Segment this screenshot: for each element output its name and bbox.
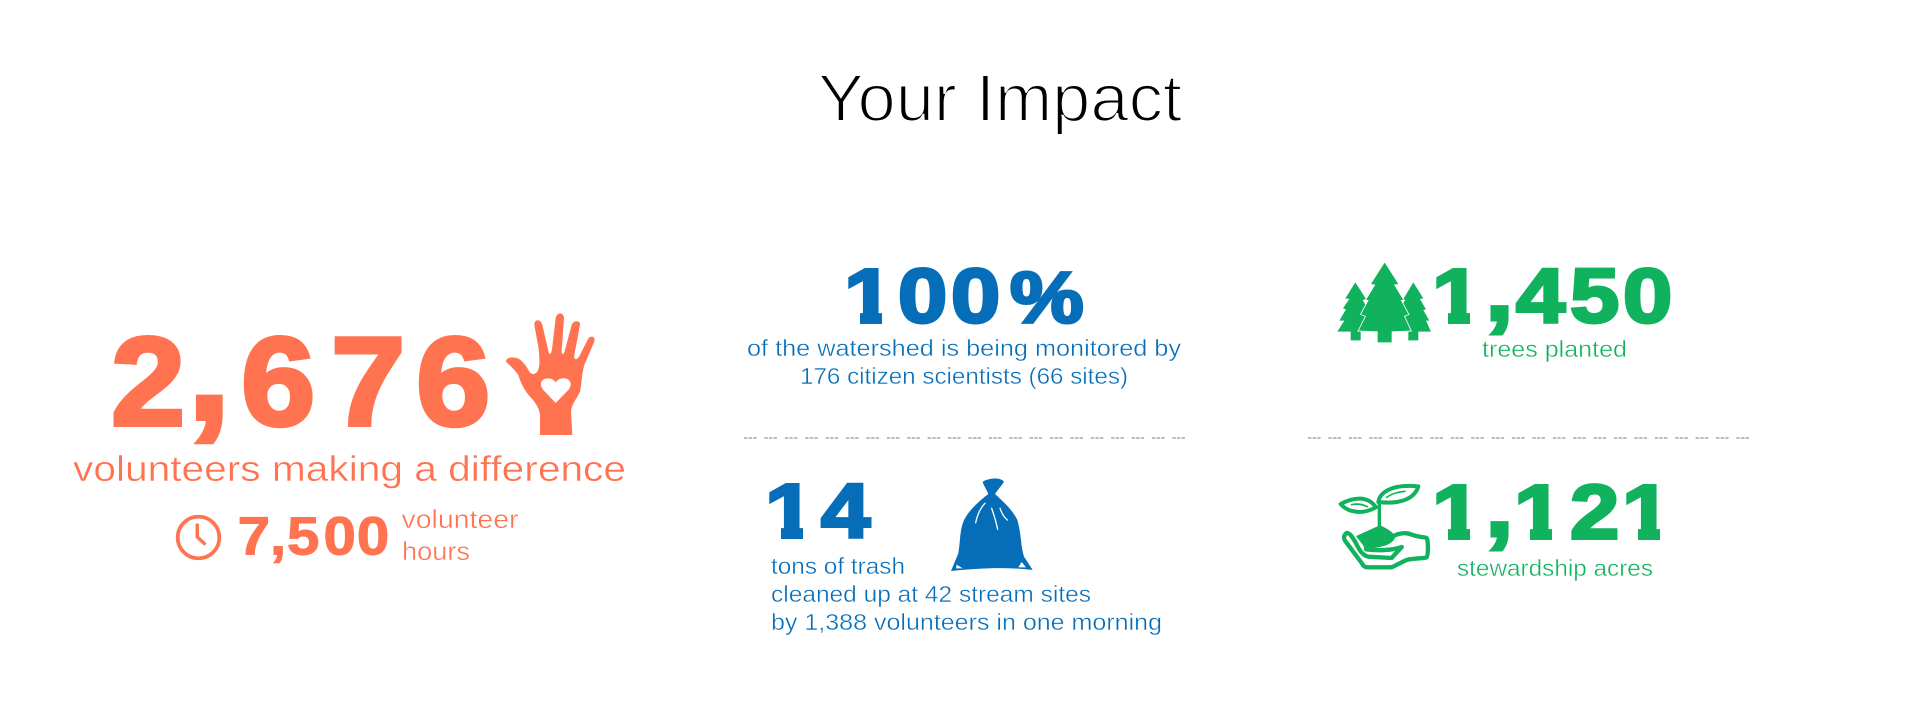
divider: right column xyxy=(1308,437,1749,439)
big number: trees: 5 xyxy=(1570,253,1619,339)
caption: volunteer hours: volunteer xyxy=(402,504,519,534)
big number: 100%: 0 xyxy=(898,253,947,339)
big number: volunteers: 6 xyxy=(241,310,315,452)
big number: volunteers: 6 xyxy=(416,310,490,452)
big number: acres: , xyxy=(1485,454,1514,555)
caption: watershed monitored xyxy=(747,335,1181,389)
number: volunteer hours: 7 xyxy=(238,505,270,566)
big number: 100% xyxy=(842,253,1084,339)
big number: acres: 1 xyxy=(1432,469,1481,555)
caption: volunteer hours xyxy=(402,504,519,566)
big number: acres xyxy=(1430,454,1677,555)
big number: 100%: % xyxy=(1010,258,1084,338)
caption: trash cleanup: cleaned up at 42 stream sites xyxy=(771,581,1091,607)
icon: seedling in hand xyxy=(1341,486,1428,567)
number: volunteer hours: 0 xyxy=(357,505,389,566)
caption: stewardship acres: stewardship acres xyxy=(1457,555,1653,581)
caption: watershed monitored: of the watershed is being monitored by xyxy=(747,335,1181,361)
big number: acres: 1 xyxy=(1622,469,1671,555)
panel: watershed monitoring xyxy=(747,253,1181,389)
big number: trees: 4 xyxy=(1516,253,1565,339)
caption: trash cleanup: tons of trash xyxy=(771,553,905,579)
big number: acres: 1 xyxy=(1514,469,1563,555)
panel: trash cleanup xyxy=(763,468,1162,635)
caption: watershed monitored: 176 citizen scientists (66 sites) xyxy=(800,363,1128,389)
big number: trees xyxy=(1430,238,1672,339)
number: volunteer hours: , xyxy=(270,505,286,566)
divider: middle column xyxy=(744,437,1185,439)
big number: 14 xyxy=(763,468,870,554)
big number: trees: , xyxy=(1485,238,1514,339)
panel: trees planted xyxy=(1337,238,1672,362)
panel: volunteers xyxy=(73,283,626,566)
big number: volunteers: 2 xyxy=(111,310,185,452)
icon: hand with heart xyxy=(506,313,595,435)
caption: volunteers making a difference: volunteers making a difference xyxy=(73,448,626,489)
caption: trash cleanup: by 1,388 volunteers in one morning xyxy=(771,609,1162,635)
caption: trash cleanup xyxy=(771,553,1162,635)
big number: volunteers: 7 xyxy=(331,310,405,452)
big number: 14: 1 xyxy=(765,468,814,554)
number: volunteer hours: 0 xyxy=(323,505,356,566)
icon: clock xyxy=(178,517,219,558)
big number: 14: 4 xyxy=(821,468,870,554)
caption: trees planted: trees planted xyxy=(1482,336,1627,362)
big number: volunteers: , xyxy=(187,283,231,451)
icon: trash bag xyxy=(951,479,1033,571)
big number: 100%: 0 xyxy=(951,253,1000,339)
number: volunteer hours: 5 xyxy=(287,505,319,566)
big number: trees: 0 xyxy=(1623,253,1672,339)
big number: trees: 1 xyxy=(1432,253,1481,339)
title: Your Impact xyxy=(818,61,1182,136)
big number: 100%: 1 xyxy=(844,253,893,339)
big number: acres: 2 xyxy=(1570,469,1619,555)
icon: pine trees xyxy=(1337,263,1431,342)
caption: volunteer hours: hours xyxy=(402,536,470,566)
panel: stewardship acres xyxy=(1341,454,1677,581)
